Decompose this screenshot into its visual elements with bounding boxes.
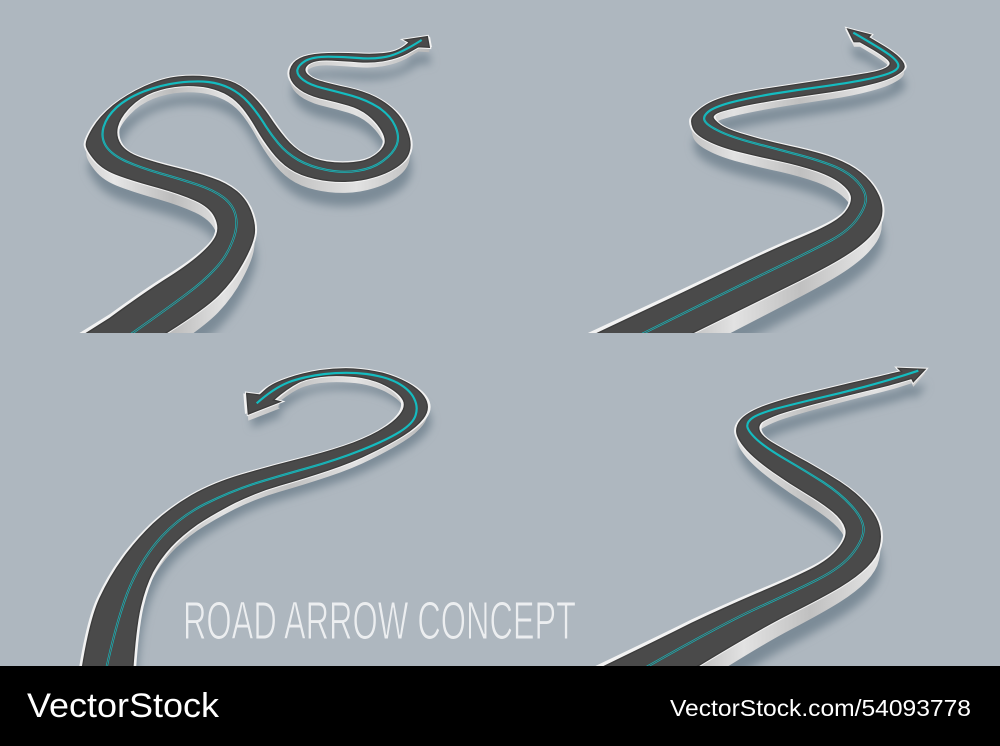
teal centre line [102,40,422,338]
white road edges [591,368,928,672]
road surface with arrow head [82,369,427,670]
road side wall [593,369,925,691]
road surface with arrow head [593,368,925,672]
road arrow: bottom right [591,368,928,706]
road side wall [86,42,430,333]
road shadow [595,385,927,706]
white road edges [76,37,432,338]
road surface with arrow head [78,37,429,338]
teal centre line [106,373,417,670]
road arrow: top right [588,26,908,333]
road shadow [690,44,908,333]
road side wall [82,370,427,677]
road side wall [692,42,904,333]
footer logo: VectorStock [27,687,220,725]
road arrow: bottom left [79,369,431,684]
road shadow [84,52,434,333]
title: ROAD ARROW CONCEPT [183,592,576,651]
white road edges [584,29,907,338]
footer bar [0,666,1000,746]
teal centre line [638,371,918,672]
road arrow: top left [80,34,434,333]
white road edges [79,369,431,670]
road shadow [86,383,431,684]
teal centre line [633,33,898,338]
footer url: VectorStock.com/54093778 [670,695,971,721]
road surface with arrow head [587,29,904,338]
